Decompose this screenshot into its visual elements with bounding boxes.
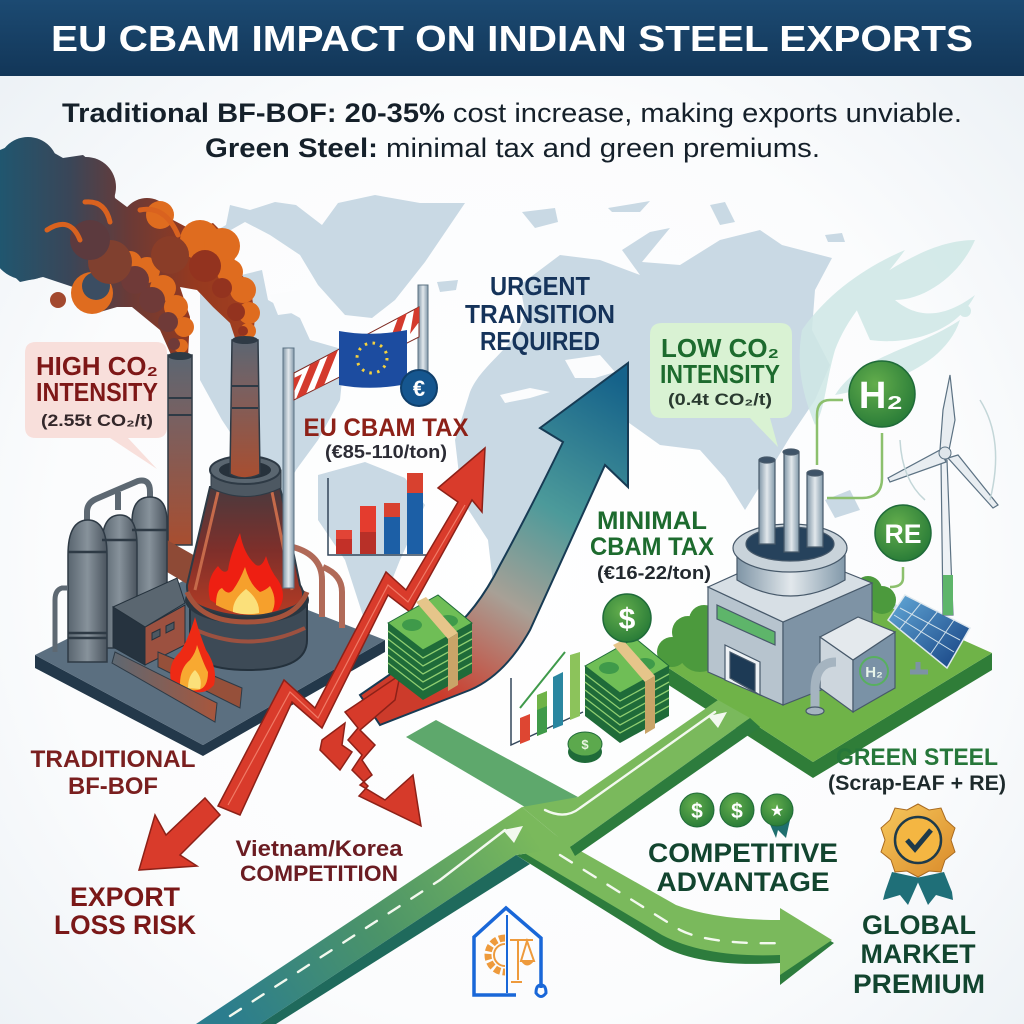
big transition arrow <box>360 363 628 725</box>
minimal CBAM tax label <box>590 507 714 583</box>
global market premium label <box>853 910 985 999</box>
platform <box>35 570 385 756</box>
small building <box>113 578 185 665</box>
furnace base <box>185 576 309 670</box>
front bar <box>112 652 217 722</box>
global market premium label: MARKET <box>860 939 976 969</box>
intro text: Traditional BF-BOF: 20-35% cost increase, making exports unviable. <box>62 98 962 128</box>
competitive advantage label <box>648 838 838 897</box>
export loss label: LOSS RISK <box>54 910 196 940</box>
icon: H2 <box>849 361 915 427</box>
icons: advantage coins <box>680 793 793 838</box>
furnace flame <box>209 533 283 615</box>
icons: advantage coins: $ <box>731 800 743 823</box>
title: EU CBAM IMPACT ON INDIAN STEEL EXPORTS <box>51 18 973 59</box>
red zigzag arrow <box>218 448 485 815</box>
traditional label: TRADITIONAL <box>30 746 196 773</box>
road to market <box>516 847 834 985</box>
intro text: Green Steel: minimal tax and green premiums. <box>205 133 820 163</box>
green steel label: GREEN STEEL <box>836 744 998 771</box>
callout: high CO2: INTENSITY <box>36 377 158 407</box>
icon: small coin stack: $ <box>581 737 589 752</box>
smoke silhouette <box>0 137 255 357</box>
stacks <box>759 449 823 552</box>
EU CBAM tax label: EU CBAM TAX <box>304 414 469 442</box>
export loss label <box>54 882 196 940</box>
EU CBAM tax label <box>304 414 469 462</box>
right pipes <box>293 547 342 628</box>
minimal CBAM tax label: MINIMAL <box>597 507 707 535</box>
solar panel <box>888 595 970 672</box>
callout: low CO2 <box>650 323 792 447</box>
H2 unit <box>806 617 895 715</box>
euro coin <box>401 370 437 406</box>
money stack: green <box>585 638 669 743</box>
smoke plume <box>0 137 260 357</box>
H2 unit: H₂ <box>865 664 883 681</box>
furnace cone <box>187 456 307 622</box>
back bar <box>158 652 242 708</box>
road stub <box>406 720 578 810</box>
urgent transition label: URGENT <box>490 271 590 301</box>
storage tanks <box>55 480 167 662</box>
competition label: Vietnam/Korea <box>236 836 403 861</box>
chart: green growth <box>511 652 583 745</box>
icon: RE <box>875 505 931 561</box>
callout: high CO2: HIGH CO₂ <box>36 351 158 381</box>
intro text <box>62 98 962 163</box>
inner plume shading <box>70 220 248 350</box>
world map <box>200 195 905 640</box>
green platform <box>657 576 992 778</box>
urgent transition label: TRANSITION <box>465 299 615 329</box>
road to plant <box>522 700 750 847</box>
hearth flame <box>170 617 215 693</box>
orange lobes <box>71 201 260 353</box>
traditional label: BF-BOF <box>68 773 158 800</box>
EU flag <box>339 330 407 388</box>
green steel label <box>828 744 1006 795</box>
competition label: COMPETITION <box>240 861 398 886</box>
icons: advantage coins: $ <box>691 800 703 823</box>
left chimney <box>167 352 197 590</box>
green road network <box>196 700 834 1024</box>
callout: high CO2: (2.55t CO₂/t) <box>41 411 153 430</box>
connector lines <box>817 400 903 587</box>
minimal CBAM tax label: (€16-22/ton) <box>597 563 711 583</box>
EU CBAM tax label: (€85-110/ton) <box>325 442 447 462</box>
right chimney <box>230 336 260 478</box>
traditional label <box>30 746 196 800</box>
main road <box>196 807 570 1024</box>
callout: low CO2: LOW CO₂ <box>661 333 779 363</box>
broken arrow section <box>320 675 421 826</box>
title banner <box>0 0 1024 76</box>
map highlights <box>270 290 615 403</box>
green steel label: (Scrap-EAF + RE) <box>828 772 1006 795</box>
callout: low CO2: (0.4t CO₂/t) <box>668 390 772 409</box>
urgent transition label <box>465 271 615 356</box>
wind swirl <box>800 240 975 425</box>
icon: dollar coin: $ <box>619 603 636 636</box>
callout: high CO2 <box>25 342 167 469</box>
callout: low CO2: INTENSITY <box>660 359 780 389</box>
wind turbine <box>888 375 998 615</box>
main building <box>708 550 872 705</box>
export loss label: EXPORT <box>70 882 180 912</box>
reactor drum <box>733 524 847 596</box>
lane marks <box>230 712 785 1016</box>
minimal CBAM tax label: CBAM TAX <box>590 533 714 561</box>
competition label <box>236 836 403 886</box>
logo <box>474 908 546 996</box>
export loss arrow <box>139 798 220 870</box>
global market premium label: GLOBAL <box>862 910 976 940</box>
competitive advantage label: ADVANTAGE <box>656 867 830 897</box>
urgent transition label: REQUIRED <box>480 326 600 356</box>
icon: dollar coin <box>603 594 651 642</box>
competitive advantage label: COMPETITIVE <box>648 838 838 868</box>
tax bar chart <box>328 473 430 555</box>
money stack: cost <box>388 595 472 700</box>
icon: RE: RE <box>884 519 922 549</box>
blast furnace plant <box>35 336 385 756</box>
global market premium label: PREMIUM <box>853 969 985 999</box>
icons: advantage coins: ★ <box>770 803 784 820</box>
icon: medal <box>881 804 955 905</box>
icon: H2: H₂ <box>859 375 903 417</box>
icon: small coin stack <box>568 732 602 763</box>
green steel plant <box>708 449 895 715</box>
EU border barrier <box>283 285 437 588</box>
crescent highlights <box>47 202 178 240</box>
euro coin: € <box>413 376 425 401</box>
